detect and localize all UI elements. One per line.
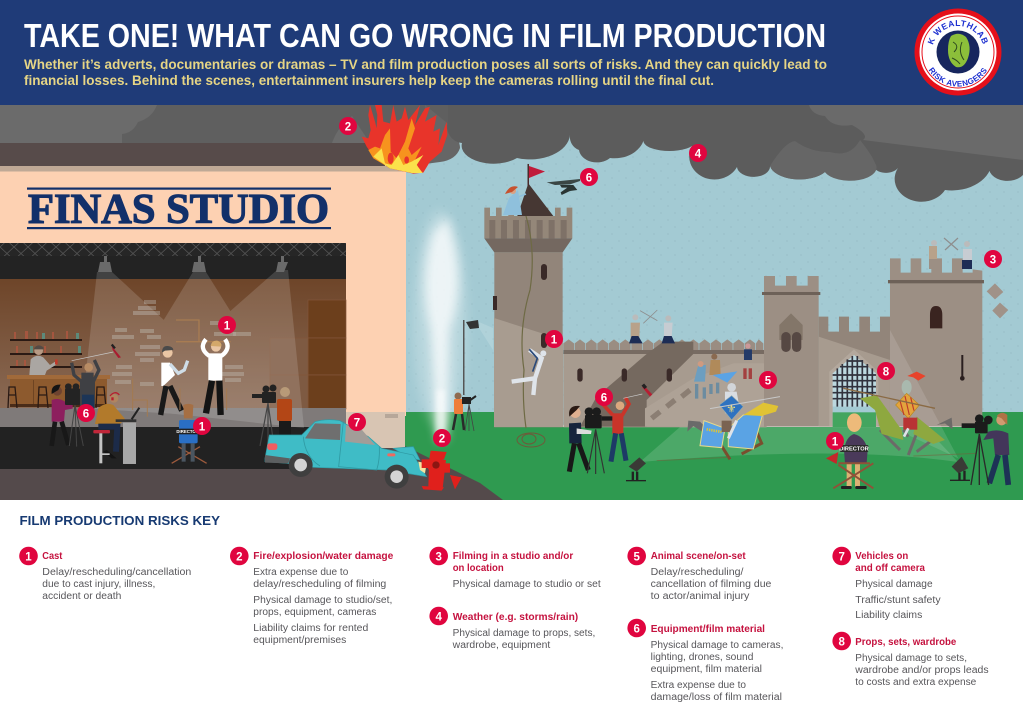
risk number markers on scene: 6 bbox=[601, 392, 607, 404]
key item 8: props, sets, wardrobe: Props, sets, wardrobe bbox=[855, 636, 956, 648]
risk number markers on scene: 3 bbox=[990, 254, 996, 266]
key item 1: cast: Cast bbox=[42, 550, 63, 562]
studio stage room bbox=[0, 243, 503, 500]
key item 7: vehicles: 7 bbox=[838, 552, 845, 564]
risk number markers on scene: 5 bbox=[765, 376, 772, 388]
stage floor bbox=[0, 408, 346, 428]
key item 2: fire, explosion, water damage bbox=[230, 547, 393, 646]
key item 6: equipment and film material: damage/loss of film material bbox=[651, 692, 782, 703]
car crash bbox=[265, 420, 427, 489]
water jet from hydrant bbox=[413, 210, 467, 442]
key item 3: filming in a studio or on location: Physical damage to studio or set bbox=[453, 579, 601, 590]
flying clapper prop bbox=[623, 383, 652, 398]
fire on roof bbox=[362, 105, 447, 174]
risk number markers on scene: 1 bbox=[224, 320, 231, 332]
key item 5: animal scene: 5 bbox=[633, 552, 640, 564]
key item 8: props, sets, wardrobe bbox=[832, 632, 989, 688]
title: TAKE ONE! WHAT CAN GO WRONG IN FILM PRODUCTION bbox=[24, 17, 826, 54]
person: camera operator right bbox=[252, 384, 292, 446]
key heading: FILM PRODUCTION RISKS KEY bbox=[20, 513, 220, 528]
key item 2: fire, explosion, water damage: delay/rescheduling of filming bbox=[253, 579, 386, 590]
key item 8: props, sets, wardrobe: 8 bbox=[838, 636, 845, 648]
header banner bbox=[0, 0, 1023, 105]
sword fighters on wall bbox=[629, 310, 675, 343]
logo: RISK AVENGERS bbox=[928, 67, 987, 87]
person: camera operator in purple bbox=[52, 383, 83, 447]
key item 5: animal scene: Animal scene/on-set bbox=[651, 550, 746, 562]
key item 5: animal scene: cancellation of filming due bbox=[651, 579, 772, 590]
risk number markers on scene: 1 bbox=[199, 422, 206, 434]
left round tower bbox=[484, 183, 572, 427]
risk number markers on scene: 2 bbox=[439, 434, 445, 446]
person: actor holding shelf bbox=[203, 339, 228, 415]
key item 2: fire, explosion, water damage: props, equipment, cameras bbox=[253, 607, 376, 618]
key item 2: fire, explosion, water damage: Fire/explosion/water damage bbox=[253, 550, 393, 562]
key item 8: props, sets, wardrobe: Physical damage to sets, bbox=[855, 653, 967, 664]
person: laptop editor bbox=[93, 393, 139, 464]
studio building bbox=[0, 143, 406, 416]
person: camera man front right bbox=[950, 413, 1009, 485]
key item 7: vehicles: Traffic/stunt safety bbox=[855, 595, 941, 606]
drone bbox=[547, 179, 580, 195]
key item 2: fire, explosion, water damage: Liability claims for rented bbox=[253, 623, 368, 634]
person: director from behind bbox=[826, 413, 873, 489]
spectators on stairs bbox=[694, 343, 752, 399]
risk number markers on scene: 6 bbox=[586, 172, 592, 184]
risk number markers on scene bbox=[77, 117, 1002, 450]
key item 6: equipment and film material: Extra expense due to bbox=[651, 680, 746, 691]
camera crew at left of castle bbox=[569, 371, 780, 481]
set chairs bbox=[133, 378, 227, 417]
flag on tower bbox=[528, 164, 545, 186]
key item 5: animal scene: Delay/rescheduling/ bbox=[651, 567, 744, 578]
key item 3: filming in a studio or on location: 3 bbox=[435, 552, 442, 564]
sword fighters on right tower bbox=[929, 238, 972, 269]
brick patches bbox=[112, 300, 251, 386]
key item 6: equipment and film material: equipment, film material bbox=[651, 664, 762, 675]
horse and knight: blue: ⚜ bbox=[726, 404, 736, 416]
person: director from behind: DIRECTOR bbox=[839, 447, 869, 453]
risk number markers on scene: 8 bbox=[883, 366, 890, 378]
key item 4: weather bbox=[429, 607, 595, 651]
risk number markers on scene: 1 bbox=[551, 334, 558, 346]
back wall bbox=[0, 279, 346, 409]
person: actor left fighting bbox=[161, 346, 188, 415]
lighting truss bbox=[0, 243, 346, 256]
person: studio director seat bbox=[172, 404, 207, 463]
key item 8: props, sets, wardrobe: wardrobe and/or props leads bbox=[854, 665, 989, 676]
key item 2: fire, explosion, water damage: Extra expense due to bbox=[253, 567, 349, 578]
bar shelves and bar counter bbox=[7, 331, 110, 408]
key item 2: fire, explosion, water damage: 2 bbox=[236, 552, 243, 564]
studio sign: FINAS STUDIO bbox=[28, 187, 329, 233]
key item 1: cast: 1 bbox=[25, 552, 32, 564]
stunt knight on rope bbox=[512, 349, 546, 395]
key item 7: vehicles: and off camera bbox=[855, 562, 925, 574]
person: woman on tower bbox=[503, 186, 526, 215]
key item 6: equipment and film material: Physical damage to cameras, bbox=[651, 640, 783, 651]
key item 4: weather: Physical damage to props, sets, bbox=[453, 628, 595, 639]
key item 8: props, sets, wardrobe: to costs and extra expense bbox=[855, 677, 977, 688]
key item 4: weather: wardrobe, equipment bbox=[452, 640, 551, 651]
spot lamps bbox=[98, 256, 288, 272]
key item 6: equipment and film material: 6 bbox=[633, 624, 640, 636]
key item 6: equipment and film material: lighting, drones, sound bbox=[651, 652, 753, 663]
tower 2, connecting wall, right tower bbox=[762, 258, 1008, 458]
risk number markers on scene: 7 bbox=[354, 418, 360, 430]
key item 3: filming in a studio or on location bbox=[429, 547, 601, 590]
risk number markers on scene: 4 bbox=[695, 148, 702, 160]
key item 2: fire, explosion, water damage: equipment/premises bbox=[253, 635, 346, 646]
key item 2: fire, explosion, water damage: Physical damage to studio/set, bbox=[253, 595, 392, 606]
key item 6: equipment and film material bbox=[627, 619, 783, 703]
key item 5: animal scene bbox=[627, 547, 772, 602]
ground: grass bbox=[405, 412, 1023, 500]
logo bbox=[914, 8, 1002, 96]
person: studio director seat: DIRECTOR bbox=[176, 429, 200, 434]
loose castle blocks bbox=[987, 283, 1008, 318]
risk number markers on scene: 6 bbox=[83, 408, 89, 420]
storm clouds bbox=[0, 105, 1023, 202]
key item 1: cast: due to cast injury, illness, bbox=[42, 579, 155, 590]
person: stunt camera operator on location bbox=[453, 392, 476, 431]
floodlight left bbox=[626, 457, 646, 481]
horse and knight: blue bbox=[657, 371, 780, 461]
spotlight beams bbox=[82, 270, 304, 428]
key item 7: vehicles bbox=[832, 547, 941, 621]
main wall bbox=[563, 339, 767, 427]
rope bbox=[522, 216, 532, 428]
set lights pools on grass bbox=[640, 427, 958, 462]
key item 7: vehicles: Vehicles on bbox=[855, 550, 908, 562]
subtitle bbox=[24, 57, 827, 88]
horse and knight: green bbox=[843, 372, 977, 456]
floodlight right bbox=[950, 457, 970, 481]
road bbox=[0, 446, 503, 500]
person: bartender bbox=[29, 345, 58, 375]
prop: falling shelf bbox=[176, 320, 231, 342]
key item 7: vehicles: Liability claims bbox=[855, 610, 922, 621]
logo: K WEALTHLAB bbox=[928, 20, 988, 44]
key item 3: filming in a studio or on location: on location bbox=[453, 562, 504, 574]
sky bbox=[406, 105, 1023, 425]
person: boom operator bbox=[72, 344, 121, 411]
key item 5: animal scene: to actor/animal injury bbox=[651, 591, 749, 602]
key item 3: filming in a studio or on location: Filming in a studio and/or bbox=[453, 550, 573, 562]
key item 1: cast bbox=[19, 547, 191, 602]
person: camera man bbox=[569, 406, 614, 474]
roof bbox=[0, 143, 385, 166]
key item 7: vehicles: Physical damage bbox=[855, 579, 933, 590]
location lamp on pole bbox=[463, 320, 493, 395]
key item 4: weather: 4 bbox=[435, 612, 442, 624]
castle bbox=[484, 164, 1008, 458]
crates bbox=[270, 300, 346, 409]
person: man in red waving bbox=[603, 397, 629, 462]
risk number markers on scene: 1 bbox=[832, 436, 839, 448]
risk number markers on scene: 2 bbox=[345, 122, 351, 134]
subtitle: financial losses. Behind the scenes, entertainment insurers help keep the cameras rolling until the final cut. bbox=[24, 73, 714, 88]
key item 1: cast: accident or death bbox=[42, 591, 121, 602]
studio cast and crew bbox=[29, 320, 231, 464]
key item 4: weather: Weather (e.g. storms/rain) bbox=[453, 611, 578, 623]
key item 1: cast: Delay/rescheduling/cancellation bbox=[42, 567, 191, 578]
fire hydrant bbox=[422, 451, 462, 491]
subtitle: Whether it’s adverts, documentaries or dramas – TV and film production poses all sorts of risks. And they can quickly lead to bbox=[24, 57, 827, 72]
key item 6: equipment and film material: Equipment/film material bbox=[651, 623, 765, 635]
